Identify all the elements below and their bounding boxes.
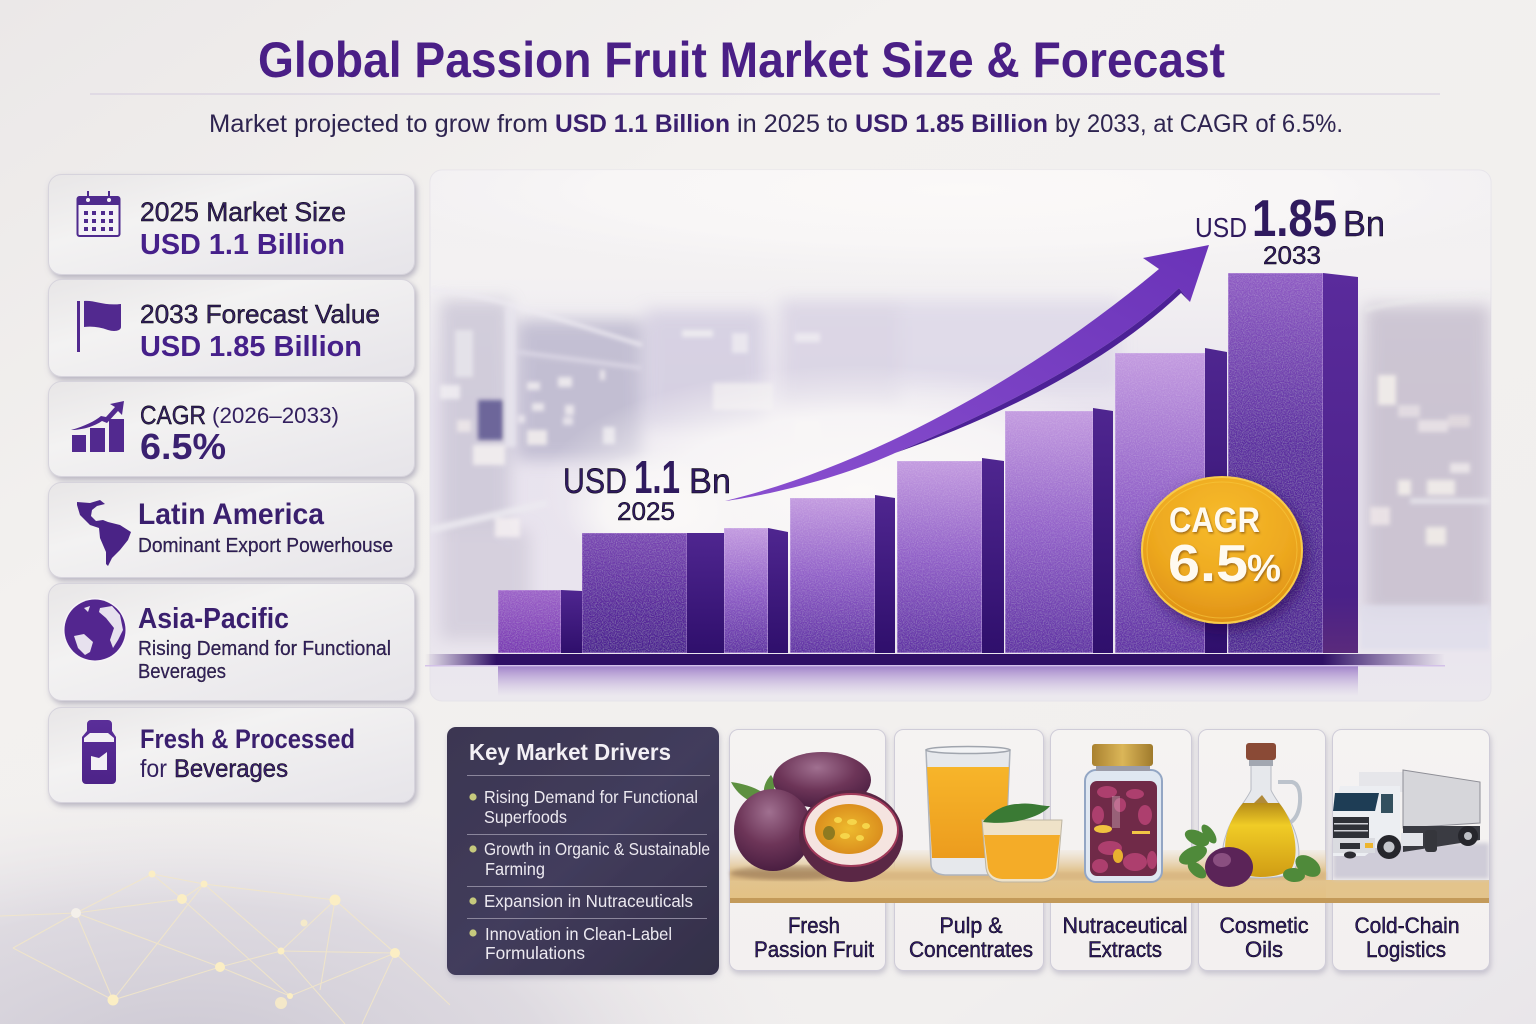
tile: pulp and concentrates (894, 730, 1044, 970)
icon: globe (63, 598, 127, 662)
tile: cold-chain logistics: Cold-Chain (1354, 913, 1460, 938)
bar 5 (897, 458, 1004, 653)
label: 2033 value: 2033 (1263, 242, 1321, 270)
bars (498, 273, 1358, 653)
tile: fresh passion fruit: Passion Fruit (754, 937, 874, 962)
card text: Beverages (138, 660, 226, 683)
title divider (90, 94, 1440, 95)
card: CAGR (48, 382, 414, 476)
network pattern bottom left (0, 870, 450, 1024)
tile: fresh passion fruit (730, 730, 886, 970)
card: Asia-Pacific (48, 584, 414, 700)
label: 2033 value: Bn (1343, 203, 1385, 244)
icon: growth chart (71, 401, 124, 452)
illustration: extract jar (1085, 744, 1162, 882)
card: Latin America (48, 482, 414, 578)
subtitle: in 2025 to (737, 110, 848, 138)
label: 2025 value: Bn (689, 462, 731, 501)
CAGR coin badge: CAGR (1169, 501, 1260, 540)
card text (138, 498, 393, 557)
label: 2033 value: 1.85 (1252, 190, 1337, 248)
card text: for (140, 755, 167, 783)
illustration: passion fruits (730, 752, 903, 882)
tile: cosmetic oils: Oils (1245, 937, 1283, 962)
tile: nutraceutical extracts: Extracts (1088, 937, 1162, 962)
driver 1 (469, 787, 698, 827)
card text: Rising Demand for Functional (138, 637, 391, 660)
illustration: oil bottle (1176, 743, 1325, 887)
card text (138, 603, 391, 683)
CAGR coin badge (1142, 477, 1302, 623)
subtitle: USD 1.1 Billion (555, 110, 730, 138)
card text (140, 724, 355, 783)
panel: key market drivers (447, 727, 719, 975)
icon: calendar (77, 191, 120, 236)
growth arrow (725, 245, 1209, 501)
card: 2025 market size (48, 174, 414, 274)
tile: pulp and concentrates: Concentrates (909, 937, 1033, 962)
subtitle: USD 1.85 Billion (855, 110, 1048, 138)
icon: flag (77, 301, 121, 352)
label: 2033 value: USD (1195, 212, 1247, 243)
card: fresh and processed (48, 708, 414, 802)
label: 2025 value: 2025 (617, 498, 675, 526)
bar 4 (790, 495, 895, 653)
label: 2033 value (1195, 190, 1385, 270)
card text: Asia-Pacific (138, 603, 289, 635)
card text: 2025 Market Size (140, 197, 346, 227)
chart baseline and reflection (425, 654, 1445, 696)
bar 8 (1228, 273, 1358, 653)
card text (140, 299, 380, 363)
card text: 6.5% (140, 426, 226, 467)
bar 1 (498, 590, 582, 653)
driver 4: Innovation in Clean-Label (485, 924, 672, 944)
label: 2025 value: USD (563, 462, 627, 501)
tile: pulp and concentrates: Pulp & (940, 913, 1003, 938)
card text: USD 1.85 Billion (140, 331, 362, 363)
CAGR coin badge: % (1247, 548, 1281, 590)
bar 3 (724, 528, 788, 653)
card text (140, 400, 339, 467)
card text: USD 1.1 Billion (140, 229, 345, 261)
card text: CAGR (140, 400, 206, 430)
driver 2: Growth in Organic & Sustainable (484, 839, 710, 859)
bar 6 (1005, 408, 1113, 653)
tile: nutraceutical extracts (1050, 730, 1192, 970)
card text: 2033 Forecast Value (140, 299, 380, 329)
bar 2 (582, 533, 724, 653)
product strip (730, 730, 1490, 970)
card text: (2026–2033) (212, 403, 339, 428)
title: Global Passion Fruit Market Size & Forecast (258, 32, 1225, 88)
label: 2025 value (563, 451, 731, 526)
card text: Latin America (138, 498, 324, 531)
card text (140, 197, 346, 261)
subtitle (209, 110, 1343, 138)
subtitle: by 2033, at CAGR of 6.5%. (1055, 110, 1343, 138)
subtitle: Market projected to grow from (209, 110, 548, 138)
tile: cosmetic oils: Cosmetic (1220, 913, 1308, 938)
card text: Fresh & Processed (140, 724, 355, 754)
driver 1: Rising Demand for Functional (484, 787, 698, 807)
bar 7 (1115, 348, 1227, 653)
tile: cosmetic oils (1198, 730, 1326, 970)
tile: nutraceutical extracts: Nutraceutical (1062, 913, 1188, 938)
driver 1: Superfoods (484, 807, 567, 827)
CAGR coin badge: 6.5 (1168, 535, 1248, 593)
driver 3: Expansion in Nutraceuticals (484, 891, 693, 911)
icon: bottle (82, 720, 116, 784)
illustration: refrigerated truck (1333, 770, 1489, 879)
drivers heading: Key Market Drivers (469, 739, 671, 765)
driver 2 (469, 839, 710, 879)
card: 2033 forecast value (48, 280, 414, 376)
tile: cold-chain logistics: Logistics (1366, 937, 1446, 962)
dividers (467, 775, 710, 919)
illustration: juice glasses (926, 746, 1062, 882)
blurred warehouse background (435, 170, 1491, 647)
wooden shelf (730, 850, 1489, 903)
tile: fresh passion fruit: Fresh (788, 913, 840, 938)
panel: market growth chart (425, 170, 1492, 702)
tile: cold-chain logistics (1332, 730, 1490, 970)
card text: Dominant Export Powerhouse (138, 535, 393, 557)
card text: Beverages (174, 755, 288, 783)
driver 4: Formulations (485, 943, 585, 963)
label: 2025 value: 1.1 (634, 451, 680, 503)
icon: map of Latin America (77, 500, 131, 566)
driver 2: Farming (485, 859, 545, 879)
driver 4 (469, 924, 672, 963)
